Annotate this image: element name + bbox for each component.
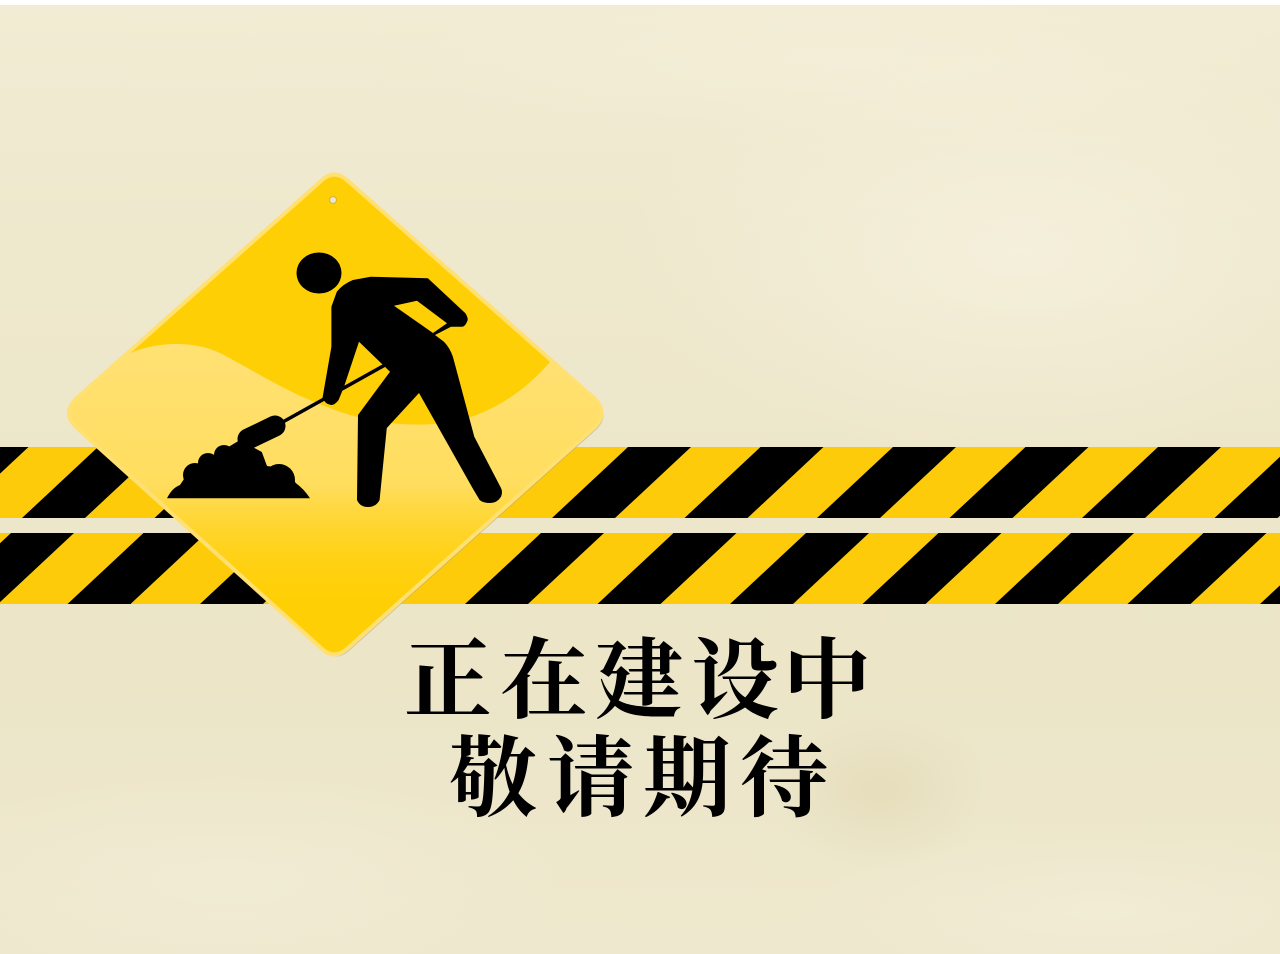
line 1: 正在建设中	[404, 634, 871, 731]
icon: dirt pile	[167, 440, 310, 498]
icon: shovel blade	[248, 426, 275, 439]
sign mounting hole	[330, 196, 336, 204]
icon: worker head	[296, 252, 342, 294]
sign shadow	[71, 176, 604, 656]
caution tape: lower band	[0, 533, 1280, 604]
sign diamond	[69, 174, 602, 654]
sign gloss	[71, 344, 600, 574]
line 2: 敬请期待	[449, 732, 828, 829]
icon: shovel handle	[281, 365, 385, 423]
road work warning sign	[66, 172, 604, 657]
sign border	[69, 174, 602, 654]
caution tape: upper band	[0, 447, 1280, 518]
icon: worker body	[322, 277, 502, 507]
title text	[404, 634, 871, 829]
